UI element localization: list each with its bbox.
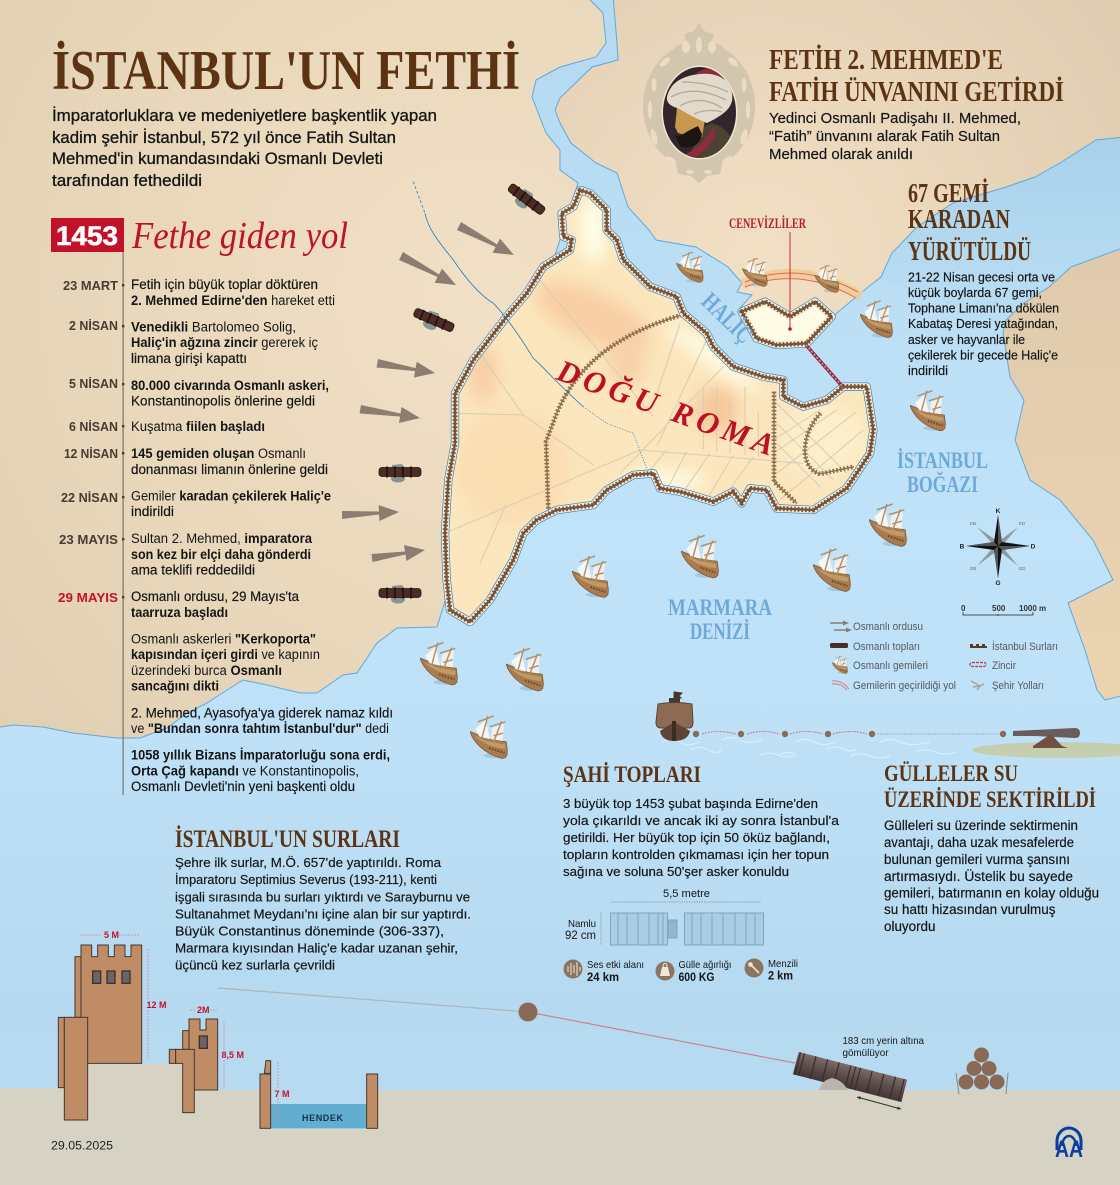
intro paragraph: Mehmed'in kumandasındaki Osmanlı Devleti (52, 150, 383, 168)
wall dimensions: 12 M (146, 1000, 167, 1010)
timeline: Kerkoporta: sancağını dikti (131, 678, 219, 694)
timeline: 23 Mayıs: Sultan 2. Mehmed, imparatora (131, 531, 312, 546)
diagram: Şahi cannon dimensions: 5,5 metre (663, 888, 710, 900)
heading: İstanbul'un Surları: İSTANBUL'UN SURLARI (175, 825, 400, 853)
compass rose: B (960, 544, 965, 550)
label: Cenevizliler with pointer: CENEVİZLİLER (729, 215, 806, 232)
icon: Ottoman army arrows (342, 222, 514, 562)
timeline: 12 Nisan (64, 446, 328, 477)
icon: ship (681, 535, 719, 578)
heading: Gülleler Su Üzerinde Sektirildi (884, 761, 1096, 812)
moat water (271, 1104, 367, 1128)
timeline: 5 Nisan (69, 376, 329, 408)
illustration: buried cannon (793, 1052, 907, 1110)
heading: Şahi Topları: ŞAHİ TOPLARI (563, 762, 701, 787)
heading: 67 Gemi Karadan Yürütüldü: KARADAN (908, 204, 1010, 234)
text: 67 gemi description: Tophane Limanı'na dökülen (908, 300, 1059, 316)
icon: ship (420, 642, 458, 685)
label: Marmara Denizi: MARMARA (668, 595, 772, 620)
land: Asian shore (1003, 247, 1120, 700)
icon: ship (742, 258, 768, 286)
icon: ship (869, 504, 907, 546)
wall dimensions: 5 M (104, 930, 119, 940)
legend: Osmanlı ordusu: Osmanlı ordusu (853, 621, 923, 633)
compass rose: K (996, 508, 1001, 515)
timeline: 2 Nisan: limana girişi kapattı (131, 351, 247, 366)
timeline: 23 Mart: 2. Mehmed Edirne'den hareket etti (131, 293, 335, 308)
compass rose: KB (970, 521, 976, 526)
timeline: 22 Nisan: 22 NİSAN (61, 490, 118, 505)
timeline: Bizans sona erdi: Osmanlı Devleti'nin yeni başkenti oldu (131, 779, 355, 794)
text: buried 183 cm note: gömülüyor (842, 1047, 889, 1059)
portrait of Mehmed II in ornate frame (643, 23, 755, 183)
text: Şahi description: topların kontrolden çıkmaması için her topun (563, 847, 829, 862)
text: Şahi description: sağına ve soluna 50'şer asker konuldu (563, 864, 789, 879)
text: Şahi description: yola çıkarıldı ve ancak iki ay sonra İstanbul'a (563, 813, 840, 828)
text: 67 gemi description: 21-22 Nisan gecesi orta ve (908, 270, 1055, 284)
text: surlar description: işgali sırasında bu surları yıktırdı ve Sarayburnu ve (175, 890, 470, 904)
icon: cannon 4 (379, 585, 421, 604)
timeline: 23 Mayıs (59, 531, 312, 578)
icon: ship (572, 556, 609, 597)
label: İstanbul Boğazı: İSTANBUL (897, 448, 988, 473)
wall dimensions: 2M (197, 1005, 210, 1015)
main walls (445, 190, 873, 622)
illustration: skipping cannonball trajectory (693, 731, 1006, 737)
legend: Osmanlı topları (830, 641, 920, 653)
map: Golden Horn chain (806, 345, 842, 386)
label: Marmara Denizi: DENİZİ (690, 619, 750, 644)
timeline: 6 Nisan: 6 NİSAN (69, 419, 118, 434)
timeline: 5 Nisan: 80.000 civarında Osmanlı askeri, (131, 378, 329, 393)
legend: Gemilerin geçirildiği yol: Gemilerin geçirildiği yol (853, 680, 956, 692)
illustration: city wall cross-section (58, 945, 378, 1128)
text: 67 gemi description: asker ve hayvanlar ile (908, 332, 1025, 347)
logo: AA (1055, 1128, 1083, 1163)
lace frame (643, 23, 755, 183)
legend: Osmanlı gemileri: Osmanlı gemileri (853, 660, 928, 672)
text: surlar description: Büyük Constantinus döneminde (306-337), (175, 924, 444, 938)
text: surlar description: Sultanahmet Meydanı'nı içine alan bir sur yaptırdı. (175, 906, 471, 922)
illustration: pile of cannonballs (956, 1048, 1008, 1094)
legend: İstanbul Surları: İstanbul Surları (992, 640, 1058, 653)
label: Cenevizliler with pointer (729, 215, 806, 331)
text: Şahi description (563, 796, 840, 879)
timeline: 23 Mart: Fetih için büyük toplar döktüren (131, 277, 318, 292)
legend: Osmanlı topları: Osmanlı topları (853, 641, 920, 653)
text: surlar description: İmparatoru Septimius Severus (193-211), kenti (175, 872, 437, 887)
timeline: Bizans sona erdi: Orta Çağ kapandı ve Konstantinopolis, (131, 764, 359, 778)
compass rose: KD (1019, 521, 1026, 526)
label: İstanbul Boğazı: BOĞAZI (907, 471, 978, 497)
illustration: island with cannon (972, 728, 1120, 758)
timeline: 29 Mayıs: taarruza başladı (131, 605, 228, 620)
icon: cannon 2 (410, 305, 456, 338)
text: Gülleler description: oluyordu (884, 919, 936, 934)
diagram: Şahi cannon dimensions: 92 cm (565, 930, 596, 942)
timeline: 29 Mayıs (58, 589, 299, 620)
timeline: Ayasofya (131, 706, 393, 736)
icon: ship (813, 549, 851, 591)
Bosphorus water shade (880, 130, 1120, 340)
scale bar: 0 (961, 604, 966, 613)
timeline: 29 Mayıs: Osmanlı ordusu, 29 Mayıs'ta (131, 589, 299, 604)
diagram: Şahi cannon dimensions (565, 888, 764, 945)
scale bar: 1000 m (1019, 604, 1046, 613)
scale bar (961, 604, 1046, 616)
map: Constantinople peninsula (413, 180, 897, 630)
legend: Zincir: Zincir (992, 660, 1016, 672)
timeline: 23 Mayıs: 23 MAYIS (59, 532, 118, 547)
label: Marmara Denizi (668, 595, 772, 644)
timeline: 2 Nisan: Venedikli Bartolomeo Solig, (131, 320, 296, 334)
heading: Gülleler Su Üzerinde Sektirildi: GÜLLELER SU (884, 761, 1018, 786)
text: Gülleler description: avantajı, daha uzak mesafelerde (884, 835, 1074, 850)
timeline: 6 Nisan: Kuşatma fiilen başladı (131, 419, 265, 434)
trajectory line from wall to cannon with cannonball (218, 988, 795, 1063)
timeline: 12 Nisan: 145 gemiden oluşan Osmanlı (131, 446, 306, 461)
heading: 1453 badge: 1453 (56, 221, 118, 251)
waves (662, 738, 955, 758)
text: surlar description (175, 855, 471, 972)
icon: cannon 3 (379, 464, 421, 482)
heading: Fetih 2. Mehmed'e (769, 43, 1064, 108)
ground (0, 1063, 1120, 1185)
timeline: 23 Mart: 23 MART (63, 278, 118, 293)
stat: ball weight: 600 KG (678, 972, 715, 984)
timeline: Kerkoporta: kapısından içeri girdi ve kapının (131, 647, 320, 662)
timeline: 2 Nisan: 2 NİSAN (69, 318, 118, 333)
timeline: 22 Nisan (61, 488, 331, 519)
logo: AA: AA (1055, 1136, 1083, 1163)
timeline: Ayasofya: ve "Bundan sonra tahtım İstanbul'dur" dedi (131, 721, 389, 736)
wall dimensions (81, 930, 290, 1126)
timeline: Bizans sona erdi (131, 748, 390, 794)
date: 29.05.2025 (51, 1138, 113, 1152)
text: 67 gemi description: çekilerek bir gecede Haliç'e (908, 348, 1058, 362)
compass rose: GD (1019, 566, 1026, 571)
inner land walls (546, 315, 854, 510)
timeline: 6 Nisan (69, 419, 265, 434)
icon: ship (506, 648, 544, 691)
text: Şahi description: 3 büyük top 1453 şubat başında Edirne'den (563, 796, 818, 811)
text: 67 gemi description: küçük boylarda 67 gemi, (908, 285, 1042, 300)
compass rose: GB (970, 566, 976, 571)
text: Fatih description: “Fatih” ünvanını alarak Fatih Sultan (769, 129, 1000, 145)
timeline: 22 Nisan: Gemiler karadan çekilerek Haliç'e (131, 488, 331, 504)
icon: ship (676, 252, 704, 282)
text: surlar description: Şehre ilk surlar, M.Ö. 657'de yaptırıldı. Roma (175, 855, 442, 870)
text: Gülleler description: Gülleleri su üzerinde sektirmenin (884, 818, 1078, 833)
heading: Fetih 2. Mehmed'e: FETİH 2. MEHMED'E (769, 43, 1003, 76)
scale bar: 500 (992, 604, 1006, 613)
text: Fatih description: Yedinci Osmanlı Padişahı II. Mehmed, (769, 111, 1021, 127)
text: Fatih description: Mehmed olarak anıldı (769, 147, 913, 163)
timeline: 2 Nisan (69, 318, 318, 366)
legend: Osmanlı ordusu (830, 620, 923, 633)
text: 67 gemi description: Kabataş Deresi yatağından, (908, 316, 1058, 331)
title: İSTANBUL'UN FETHİ (52, 40, 520, 102)
heading: 67 Gemi Karadan Yürütüldü: 67 GEMİ (908, 178, 989, 208)
icon: cannon 1 (504, 180, 548, 220)
timeline: Bizans sona erdi: 1058 yıllık Bizans İmparatorluğu sona erdi, (131, 748, 390, 762)
text: Gülleler description: su hattı hizasından vurulmuş (884, 902, 1056, 917)
text: 67 gemi description: indirildi (908, 363, 948, 378)
heading: 67 Gemi Karadan Yürütüldü: YÜRÜTÜLDÜ (908, 236, 1031, 266)
map: ships' overland route (742, 273, 861, 298)
icon: ship (910, 391, 946, 431)
compass rose: G (995, 580, 1001, 587)
land: Thrace west of the walls (0, 0, 606, 738)
label: İstanbul Boğazı (897, 448, 988, 497)
intro paragraph (52, 106, 437, 190)
legend: Şehir Yolları (971, 680, 1044, 692)
label: Doğu Roma: DOĞU ROMA (552, 352, 779, 462)
text: buried 183 cm note: 183 cm yerin altına (842, 1035, 924, 1047)
legend: İstanbul Surları (970, 640, 1058, 653)
timeline: 23 Mayıs: son kez bir elçi daha gönderdi (131, 547, 311, 562)
timeline: 12 Nisan: donanması limanın önlerine geldi (131, 462, 328, 477)
heading: 67 Gemi Karadan Yürütüldü (908, 178, 1031, 266)
stat: sound range (564, 959, 644, 984)
Lycus river (413, 182, 647, 468)
legend (830, 620, 1058, 692)
timeline axis (122, 252, 124, 795)
timeline: 23 Mayıs: ama teklifi reddedildi (131, 562, 255, 578)
text: Fatih description (769, 111, 1021, 163)
timeline: 5 Nisan: 5 NİSAN (69, 376, 118, 391)
compass rose: D (1031, 544, 1036, 550)
wall dimensions: 7 M (274, 1089, 290, 1099)
land: Galata and north shore (555, 0, 1120, 347)
text: buried 183 cm note (842, 1035, 924, 1059)
legend: Osmanlı gemileri (832, 656, 928, 674)
stat: range: Menzili (768, 958, 798, 970)
roads (448, 280, 863, 563)
timeline: 5 Nisan: Konstantinopolis önlerine geldi (131, 394, 315, 408)
illustration: Byzantine ship target (656, 692, 693, 741)
stat: sound range: 24 km (587, 972, 619, 984)
stat: sound range: Ses etki alanı (587, 959, 644, 971)
stat: range: 2 km (768, 970, 793, 982)
text: Gülleler description: artırmasıydı. Üstelik bu sayede (884, 869, 1073, 884)
label: Haliç: HALİÇ (696, 287, 758, 349)
timeline: 29 Mayıs: 29 MAYIS (58, 590, 118, 605)
intro paragraph: İmparatorluklara ve medeniyetlere başkentlik yapan (52, 106, 437, 125)
timeline: 22 Nisan: indirildi (131, 504, 174, 519)
timeline: Kerkoporta (131, 632, 320, 694)
heading: Fethe giden yol: Fethe giden yol (131, 215, 348, 257)
diagram: Şahi cannon dimensions: Namlu (568, 918, 596, 930)
text: Gülleler description: gemileri, batırmanın en kolay olduğu (884, 886, 1099, 900)
icon: ship (815, 265, 839, 293)
timeline: Kerkoporta: Osmanlı askerleri "Kerkoporta" (131, 632, 316, 646)
icon: ship (860, 301, 893, 338)
compass rose (960, 508, 1036, 587)
timeline: 2 Nisan: Haliç'in ağzına zincir gererek iç (131, 335, 318, 350)
text: Şahi description: getirildi. Her büyük top için 50 öküz bağlandı, (563, 830, 830, 845)
map: Galata walled district (742, 302, 832, 345)
legend: Zincir (970, 660, 1016, 672)
text: surlar description: üçüncü kez surlarla çevrildi (175, 958, 335, 972)
legend: Şehir Yolları: Şehir Yolları (992, 680, 1044, 692)
intro paragraph: tarafından fethedildi (52, 172, 202, 190)
icon: ship (470, 716, 508, 758)
timeline: Ayasofya: 2. Mehmed, Ayasofya'ya giderek namaz kıldı (131, 706, 393, 720)
stat: ball weight: Gülle ağırlığı (678, 959, 732, 971)
text: Gülleler description (884, 818, 1099, 934)
stat: ball weight (656, 959, 732, 984)
text: surlar description: Marmara kıyısından Haliç'e kadar uzanan şehir, (175, 940, 458, 956)
text: 67 gemi description (908, 270, 1059, 378)
intro paragraph: kadim şehir İstanbul, 572 yıl önce Fatih Sultan (52, 128, 396, 147)
timeline: Kerkoporta: üzerindeki burca Osmanlı (131, 663, 282, 678)
stat: range (744, 958, 798, 982)
text: Gülleler description: bulunan gemileri vurma şansını (884, 852, 1070, 867)
timeline: 12 Nisan: 12 NİSAN (64, 446, 118, 461)
label: Hendek: HENDEK (302, 1113, 344, 1123)
wall dimensions: 8,5 M (222, 1050, 244, 1060)
timeline: 23 Mart (63, 277, 335, 308)
